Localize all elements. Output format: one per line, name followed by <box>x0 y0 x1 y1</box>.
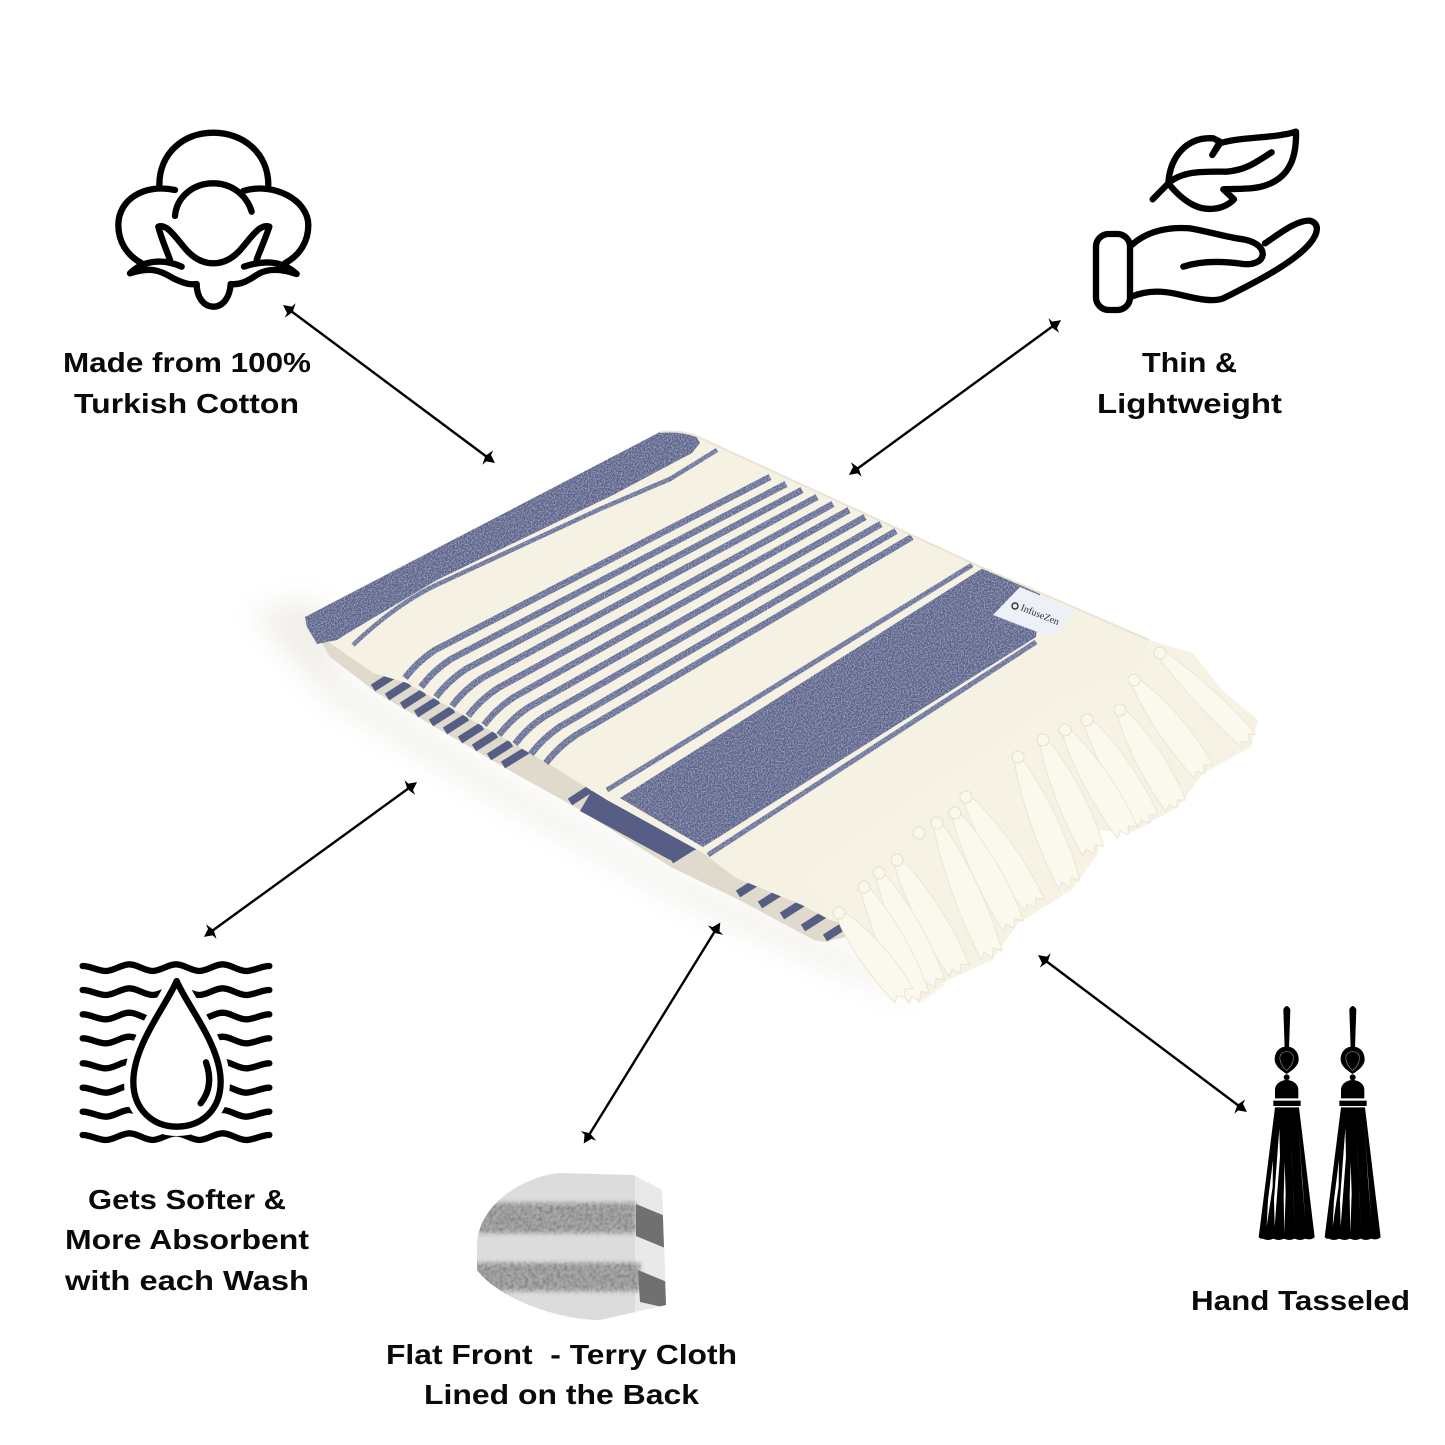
fringe tufts <box>828 645 1259 1006</box>
towel shadow <box>250 600 925 1005</box>
arrow: tassels to towel <box>1033 948 1252 1119</box>
label: cotton <box>63 347 311 419</box>
label: softer and absorbent <box>64 1184 309 1296</box>
label: hand tasseled: Hand Tasseled <box>1191 1285 1410 1316</box>
hand <box>1096 234 1130 310</box>
towel photo <box>250 432 1259 1006</box>
label: lightweight: Thin & <box>1142 347 1237 378</box>
navy bands and stripes <box>305 432 1040 855</box>
hem edge <box>660 432 1149 640</box>
lower fold layer <box>320 640 860 942</box>
fringe loop gap <box>1172 670 1218 704</box>
icon: water drop with waves <box>83 964 269 1140</box>
icon: cotton boll <box>118 133 308 307</box>
thin stripe before wide band <box>607 565 972 790</box>
icon: two tassels <box>1259 1006 1381 1240</box>
arrow: terry cloth to towel <box>576 918 728 1148</box>
arrow: lightweight to towel <box>844 313 1066 482</box>
icon: hand with leaf <box>1096 132 1317 310</box>
brand tag <box>993 587 1075 638</box>
wide navy band <box>620 568 1040 847</box>
label: softer and absorbent: More Absorbent <box>65 1224 309 1255</box>
arrow: cotton to towel <box>278 298 500 470</box>
brand tag: InfuseZen <box>1019 603 1061 628</box>
label: lightweight: Lightweight <box>1097 388 1282 419</box>
stripe group <box>405 477 912 763</box>
label: terry cloth: Lined on the Back <box>424 1379 699 1410</box>
label: softer and absorbent: Gets Softer & <box>88 1184 286 1215</box>
thin stripe after wide band <box>708 642 1036 855</box>
label: lightweight <box>1097 347 1282 419</box>
arrow: softer to towel <box>199 775 422 944</box>
icon: terry cloth swatch <box>477 1173 666 1320</box>
shadow under fringe <box>857 925 945 1003</box>
right tassel <box>1325 1006 1381 1240</box>
fringe knots <box>833 647 1166 919</box>
label: softer and absorbent: with each Wash <box>64 1265 309 1296</box>
leaf <box>1153 132 1296 209</box>
navy band top <box>305 432 700 644</box>
label: cotton: Made from 100% <box>63 347 311 378</box>
label: cotton: Turkish Cotton <box>74 388 299 419</box>
thin stripe top <box>353 450 717 645</box>
left tassel <box>1259 1006 1315 1240</box>
fringe tassels <box>806 640 1259 1006</box>
label: terry cloth: Flat Front - Terry Cloth <box>386 1339 737 1370</box>
towel top face <box>305 432 1149 920</box>
label: terry cloth <box>386 1339 737 1410</box>
